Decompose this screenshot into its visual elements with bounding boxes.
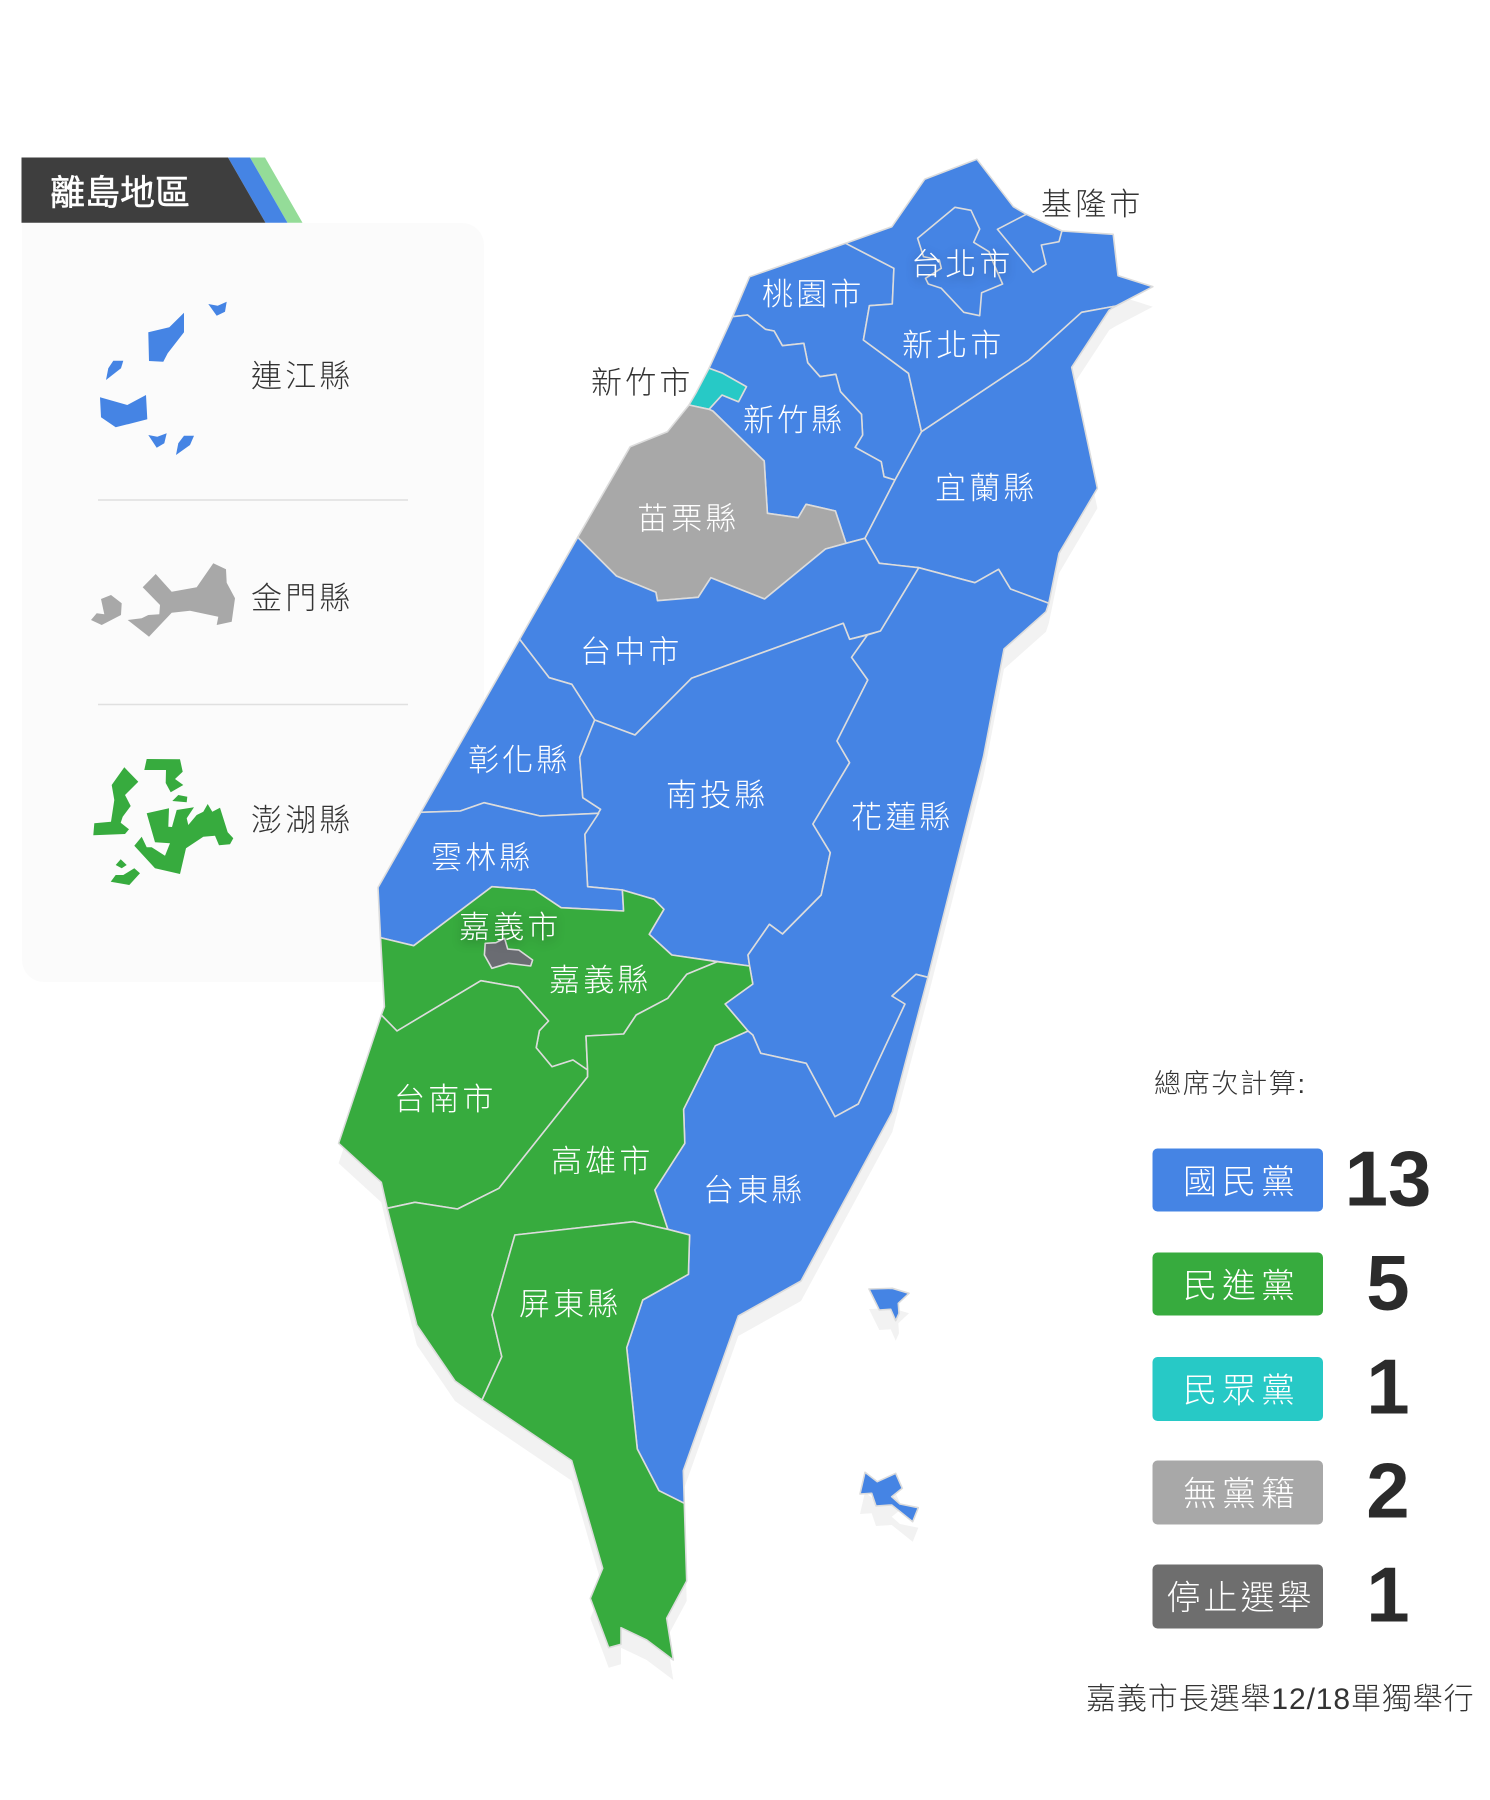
region: Kaohsiung bbox=[387, 962, 753, 1400]
label: Hualien: 花蓮縣 bbox=[851, 800, 954, 835]
label: Miaoli: 苗栗縣 bbox=[637, 502, 740, 536]
legend row: TPP: 1 bbox=[1366, 1342, 1410, 1430]
region: Nantou bbox=[580, 623, 868, 966]
legend row: TPP: 民眾黨 bbox=[1183, 1372, 1300, 1410]
region: Changhua bbox=[421, 639, 601, 816]
legend row: election suspended: 停止選舉 bbox=[1166, 1580, 1314, 1618]
map: Taiwan counties bbox=[339, 159, 1153, 1660]
label: Yunlin: 雲林縣 bbox=[431, 840, 534, 876]
region: Green Island bbox=[869, 1288, 909, 1321]
legend: total seats bbox=[1152, 1069, 1431, 1638]
legend row: DPP bbox=[1152, 1238, 1410, 1326]
label: Kinmen: 金門縣 bbox=[251, 581, 354, 616]
legend row: KMT: 國民黨 bbox=[1183, 1164, 1300, 1202]
region: Taoyuan bbox=[733, 243, 922, 480]
panel heading: 離島地區: 離島地區 bbox=[50, 174, 190, 213]
label: Taipei: 台北市 bbox=[911, 247, 1014, 282]
legend row: KMT: 13 bbox=[1345, 1134, 1431, 1222]
region: Yunlin bbox=[378, 803, 624, 946]
label: Chiayi City: 嘉義市 bbox=[459, 910, 562, 945]
label: Pingtung: 屏東縣 bbox=[519, 1287, 622, 1322]
region: Miaoli bbox=[578, 405, 846, 601]
label: Taitung: 台東縣 bbox=[703, 1173, 806, 1208]
region: Hualien bbox=[725, 568, 1049, 1117]
label: Yilan: 宜蘭縣 bbox=[935, 471, 1038, 506]
label: Hsinchu City: 新竹市 bbox=[591, 366, 694, 400]
panel heading: 離島地區 bbox=[22, 158, 302, 223]
label: New Taipei: 新北市 bbox=[902, 328, 1005, 363]
legend row: independent: 2 bbox=[1366, 1446, 1410, 1534]
label: Taichung: 台中市 bbox=[580, 634, 683, 670]
label: Tainan: 台南市 bbox=[394, 1082, 497, 1117]
legend row: independent: 無黨籍 bbox=[1183, 1476, 1300, 1514]
legend row: KMT bbox=[1152, 1134, 1431, 1222]
region: Orchid Island bbox=[860, 1472, 918, 1522]
region: Yilan bbox=[865, 306, 1116, 603]
region: Hsinchu County bbox=[709, 315, 895, 543]
icon: Lienchiang islands bbox=[100, 302, 227, 455]
legend row: election suspended bbox=[1152, 1550, 1410, 1638]
region: Taipei bbox=[918, 207, 1003, 316]
legend heading: 總席次計算: bbox=[1154, 1069, 1307, 1099]
label: Nantou: 南投縣 bbox=[666, 778, 769, 813]
footnote: 嘉義市長選舉12/18單獨舉行 bbox=[1086, 1683, 1475, 1716]
icon: Penghu islands bbox=[93, 759, 233, 885]
label: Chiayi County: 嘉義縣 bbox=[549, 963, 652, 998]
label: Hsinchu County: 新竹縣 bbox=[743, 403, 846, 438]
label: Changhua: 彰化縣 bbox=[468, 743, 571, 778]
legend row: election suspended: 1 bbox=[1366, 1550, 1410, 1638]
map labels bbox=[394, 187, 1144, 1322]
panel: outlying islands bbox=[22, 158, 484, 982]
icon: Kinmen islands bbox=[91, 563, 235, 637]
region: Tainan bbox=[339, 981, 588, 1209]
label: Keelung: 基隆市 bbox=[1041, 187, 1144, 222]
region: Taichung bbox=[520, 537, 919, 735]
map shadow bbox=[339, 179, 1153, 1680]
legend row: DPP: 5 bbox=[1366, 1238, 1410, 1326]
region: Chiayi County bbox=[380, 887, 717, 1070]
region: Chiayi City bbox=[484, 938, 533, 968]
region: New Taipei bbox=[846, 159, 1153, 432]
region: Keelung bbox=[997, 214, 1062, 272]
region: Taitung bbox=[627, 974, 928, 1503]
region: Hsinchu City bbox=[689, 368, 746, 409]
region: Pingtung bbox=[482, 1222, 690, 1660]
legend row: DPP: 民進黨 bbox=[1183, 1268, 1300, 1306]
legend row: TPP bbox=[1152, 1342, 1410, 1430]
label: Penghu: 澎湖縣 bbox=[251, 803, 354, 838]
legend row: independent bbox=[1152, 1446, 1410, 1534]
label: Kaohsiung: 高雄市 bbox=[551, 1144, 654, 1179]
label: Lienchiang: 連江縣 bbox=[251, 359, 354, 394]
label: Taoyuan: 桃園市 bbox=[762, 277, 865, 312]
